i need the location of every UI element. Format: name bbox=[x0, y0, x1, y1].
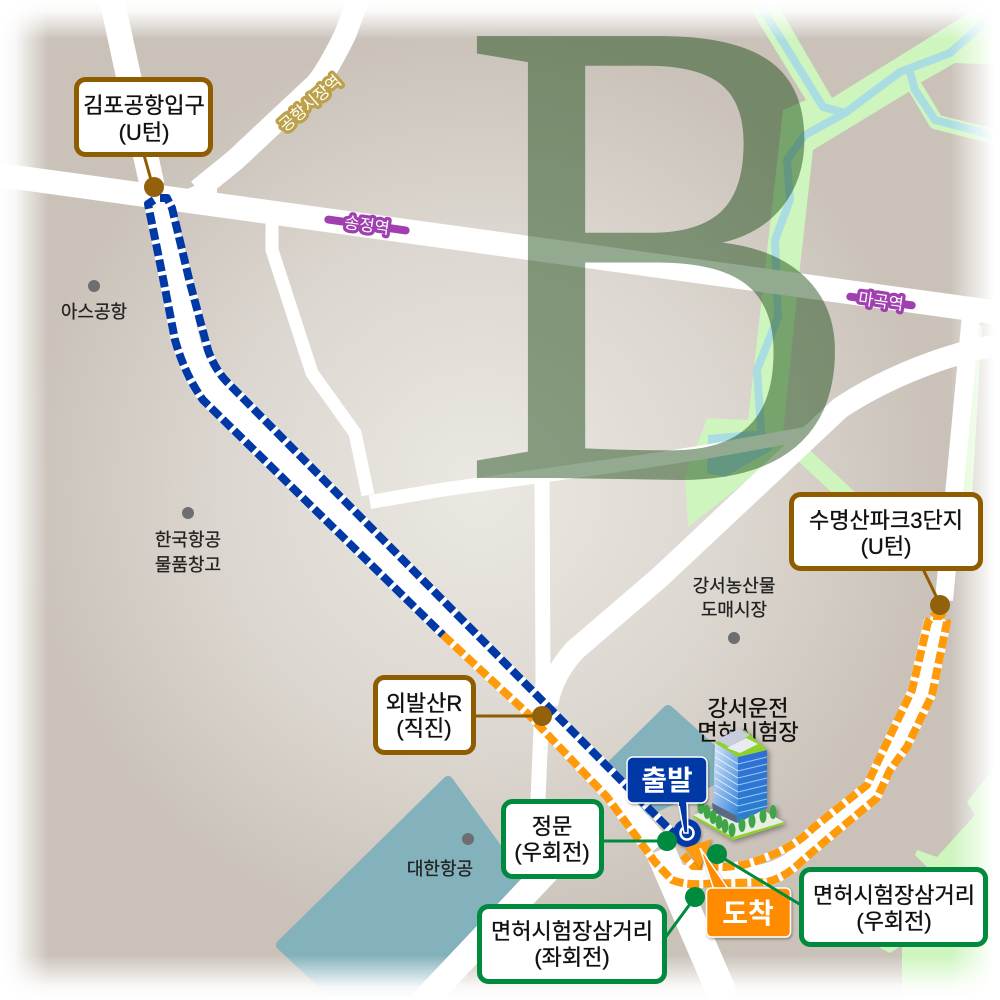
arrival arrow and label: 도착: 도착 bbox=[722, 898, 774, 929]
place: 한국항공 물품창고: 물품창고 bbox=[155, 555, 221, 575]
label: 수명산파크3단지 (U턴) bbox=[792, 494, 980, 615]
station: 공항시장역: 공항시장역 bbox=[275, 71, 345, 135]
station: 마곡역: 마곡역 bbox=[857, 289, 905, 314]
label: 외발산R (직진): 외발산R bbox=[386, 691, 462, 716]
arrival arrow and label: 도착 bbox=[685, 839, 790, 937]
label: 면허시험장삼거리 (우회전) bbox=[707, 844, 986, 944]
place: 아스공항: 아스공항 bbox=[61, 302, 127, 322]
place: 대한항공: 대한항공 bbox=[407, 859, 473, 879]
label: 면허시험장삼거리 (우회전): (우회전) bbox=[856, 909, 932, 934]
icon: building bbox=[693, 729, 784, 840]
label: 면허시험장삼거리 (좌회전): (좌회전) bbox=[534, 945, 610, 970]
place: 강서농산물 도매시장: 도매시장 bbox=[701, 600, 767, 620]
place: 한국항공 물품창고: 한국항공 bbox=[155, 530, 221, 550]
blue route: outbound dashed lanes bbox=[148, 198, 678, 838]
start pin and label: 출발: 출발 bbox=[641, 765, 693, 796]
label: 정문 (우회전): 정문 bbox=[532, 814, 572, 839]
label: 김포공항입구 (U턴): (U턴) bbox=[119, 120, 169, 145]
start pin and label: 출발 bbox=[627, 757, 707, 847]
streams bbox=[707, 0, 1000, 477]
place: 강서운전면허시험장 title bbox=[697, 696, 799, 745]
label: 외발산R (직진) bbox=[376, 678, 552, 752]
label: 김포공항입구 (U턴) bbox=[76, 80, 210, 197]
label: 면허시험장삼거리 (좌회전): 면허시험장삼거리 bbox=[491, 919, 653, 944]
park and green areas bbox=[685, 0, 1000, 1000]
place: 강서운전면허시험장 title: 강서운전 bbox=[708, 696, 788, 721]
label: 면허시험장삼거리 (우회전): 면허시험장삼거리 bbox=[813, 883, 975, 908]
label: 김포공항입구 (U턴): 김포공항입구 bbox=[83, 93, 205, 118]
orange route: return dashed lanes bbox=[443, 616, 947, 884]
place: 강서운전면허시험장 title: 면허시험장 bbox=[697, 720, 799, 745]
place: 아스공항 bbox=[61, 280, 127, 322]
route road bed bbox=[148, 198, 947, 884]
station: 마곡역 bbox=[845, 287, 917, 316]
station: 송정역: 송정역 bbox=[343, 213, 391, 238]
place: 대한항공 bbox=[407, 833, 474, 879]
place: 강서농산물 도매시장: 강서농산물 bbox=[693, 576, 775, 596]
lakes / airport areas bbox=[281, 710, 735, 1000]
label: 면허시험장삼거리 (좌회전) bbox=[480, 887, 705, 982]
label: 정문 (우회전) bbox=[504, 802, 677, 876]
label: 수명산파크3단지 (U턴): (U턴) bbox=[861, 534, 911, 559]
station: 송정역 bbox=[323, 210, 411, 241]
label: 외발산R (직진): (직진) bbox=[396, 716, 452, 741]
place: 한국항공 물품창고 bbox=[155, 507, 221, 575]
label: 정문 (우회전): (우회전) bbox=[514, 840, 590, 865]
label: 수명산파크3단지 (U턴): 수명산파크3단지 bbox=[809, 508, 963, 533]
place: 강서농산물 도매시장 bbox=[693, 576, 775, 644]
